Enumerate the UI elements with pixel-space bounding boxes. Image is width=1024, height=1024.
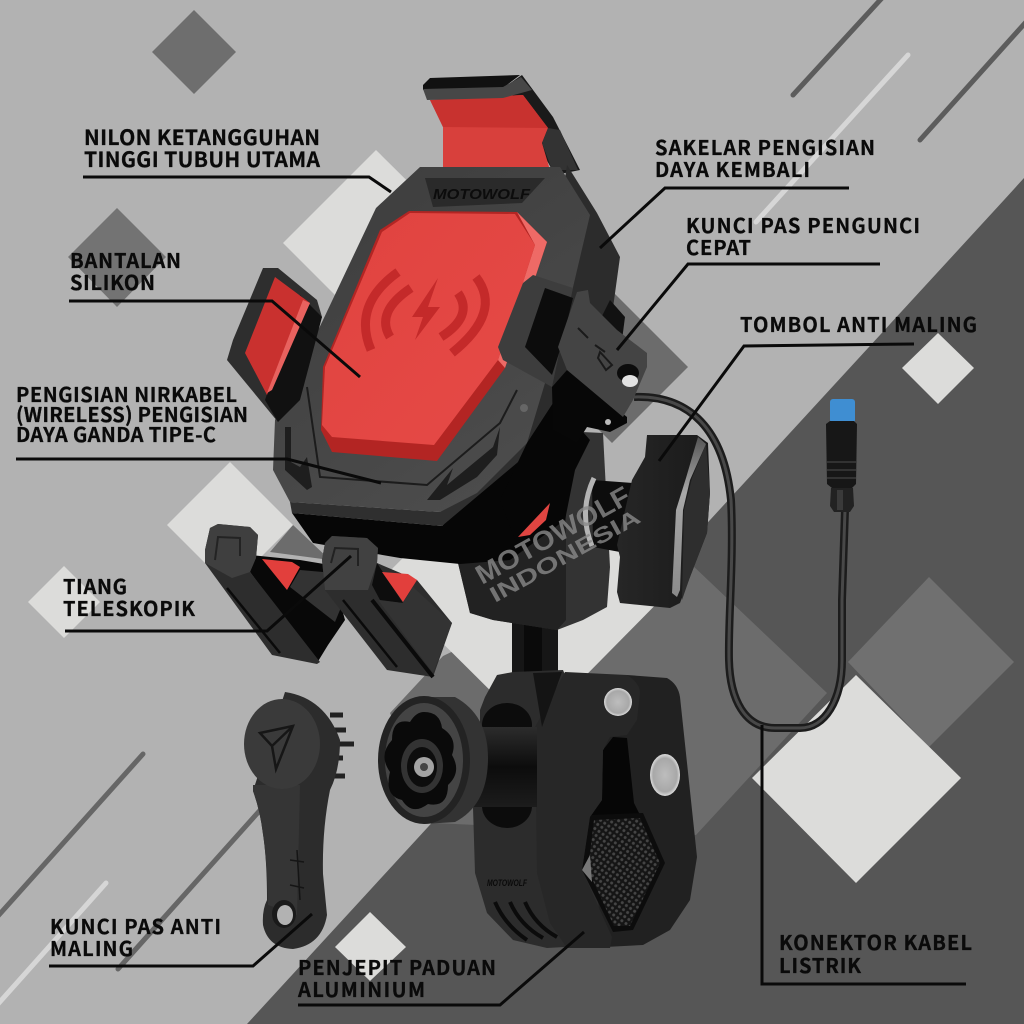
clamp back body — [473, 670, 600, 948]
central mount — [458, 430, 633, 678]
callout: kunci pas pengunci — [617, 210, 920, 350]
callout: sakelar: DAYA KEMBALI — [655, 154, 810, 183]
bolt top — [604, 688, 632, 716]
bolt side — [650, 754, 680, 796]
side grip red pad — [245, 277, 310, 395]
callout: tombol anti maling: TOMBOL ANTI MALING — [740, 309, 977, 338]
clamp slot — [590, 737, 640, 817]
holder underside — [292, 443, 565, 564]
callout: konektor kabel listrik: LISTRIK — [779, 950, 861, 979]
wrench logo — [260, 726, 293, 769]
brand plate — [425, 178, 545, 207]
callout: kunci pas anti maling — [49, 911, 312, 966]
rubber pad — [582, 813, 665, 932]
callout: penjepit paduan aluminium — [297, 932, 584, 1005]
callout: kunci pas pengunci: CEPAT — [686, 232, 751, 261]
callout: bantalan silikon: SILIKON — [70, 267, 155, 296]
brand plate: MOTOWOLF — [433, 186, 531, 203]
callout: konektor kabel listrik: KONEKTOR KABEL — [779, 927, 972, 956]
right grip — [322, 536, 452, 677]
callout: sakelar: SAKELAR PENGISIAN — [655, 132, 875, 161]
left side grip — [227, 268, 322, 422]
anti-theft wrench — [244, 692, 354, 949]
callout: pengisian nirkabel: (WIRELESS) PENGISIAN — [16, 399, 248, 428]
black block and red sliver — [500, 400, 590, 545]
callout: nilon — [83, 122, 391, 192]
callout: pengisian nirkabel — [16, 379, 381, 483]
watermark: MOTOWOLF — [470, 481, 635, 590]
holder body — [273, 165, 620, 526]
callout: sakelar — [600, 132, 875, 248]
lower side band — [290, 443, 530, 526]
upper grip — [423, 75, 580, 175]
back right panel — [525, 165, 620, 470]
clamp — [473, 670, 697, 948]
callout: nilon: NILON KETANGGUHAN — [84, 122, 320, 152]
watermark: INDONESIA — [485, 504, 644, 607]
clamp right jaw — [590, 675, 697, 947]
callout: pengisian nirkabel: DAYA GANDA TIPE-C — [16, 419, 216, 448]
power cable — [634, 397, 845, 728]
upper grip bar — [423, 75, 520, 90]
silicone pad — [321, 211, 547, 461]
callout: nilon: TINGGI TUBUH UTAMA — [84, 144, 321, 174]
left grip — [205, 524, 345, 664]
callout: kunci pas anti maling: KUNCI PAS ANTI — [50, 911, 221, 940]
vent slots — [495, 902, 557, 940]
locking nut — [378, 696, 537, 824]
callout: tiang teleskopik: TIANG — [63, 571, 127, 600]
callout: konektor kabel listrik — [762, 725, 972, 984]
wireless charging icon — [365, 272, 485, 353]
callout: penjepit paduan aluminium: ALUMINIUM — [297, 974, 425, 1003]
callout: tiang teleskopik: TELESKOPIK — [63, 593, 195, 622]
callout: bantalan silikon: BANTALAN — [70, 245, 181, 274]
callout: tombol anti maling — [659, 309, 977, 461]
shaft sockets — [482, 703, 532, 747]
telescopic lower grips — [205, 524, 452, 677]
upper red pad — [430, 95, 550, 170]
anti-theft knob — [617, 435, 710, 608]
side quick-release clamp — [498, 275, 647, 443]
body face — [273, 167, 590, 512]
callout: kunci pas anti maling: MALING — [50, 933, 133, 962]
callout: tiang teleskopik — [63, 556, 351, 631]
clamp front plate — [535, 672, 640, 948]
callout: penjepit paduan aluminium: PENJEPIT PADUAN — [298, 952, 496, 981]
callout: kunci pas pengunci: KUNCI PAS PENGUNCI — [686, 210, 920, 239]
callout: bantalan silikon — [69, 245, 360, 377]
mount shaft — [592, 480, 633, 552]
connector — [826, 399, 857, 512]
body trim — [285, 427, 312, 490]
clamp logo: MOTOWOLF — [487, 878, 527, 888]
callout: pengisian nirkabel: PENGISIAN NIRKABEL — [16, 379, 237, 408]
